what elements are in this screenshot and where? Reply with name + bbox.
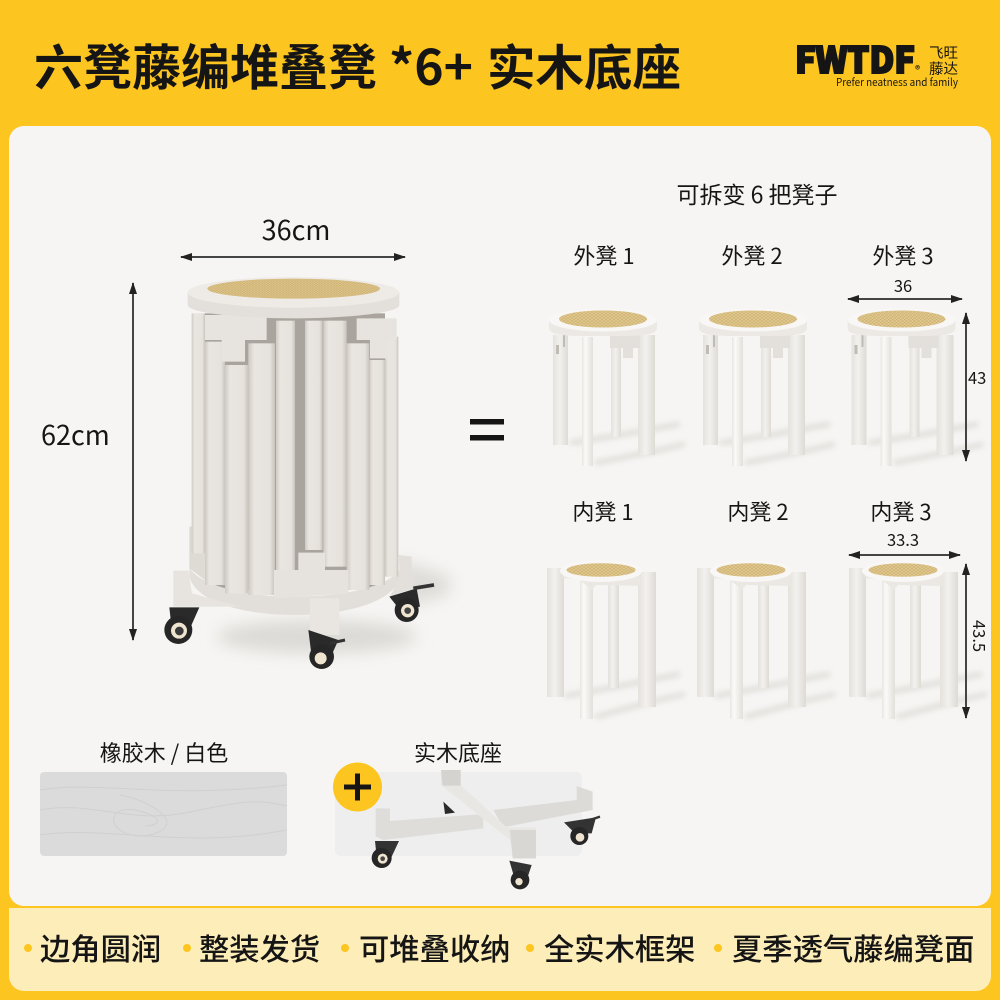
seat disc xyxy=(188,292,399,318)
bottom strip xyxy=(9,908,991,991)
inner stool 2 xyxy=(697,560,835,719)
logo xyxy=(795,32,958,90)
equals sign xyxy=(470,419,504,440)
left caster xyxy=(164,607,199,644)
inner stool 3 xyxy=(849,560,987,719)
plus badge xyxy=(333,762,382,812)
dimension: inner height 43.5: 43.5 xyxy=(968,620,992,652)
height dimension: 62cm: 62cm xyxy=(41,414,110,453)
title: *6+ xyxy=(389,29,473,100)
feature: stackable: 可堆叠收纳 xyxy=(359,925,510,969)
label: outer stool 3: 外凳 3 xyxy=(872,239,934,271)
outer stool 3 xyxy=(848,308,984,466)
logo: ® xyxy=(915,61,920,76)
folded stool legs xyxy=(192,313,398,595)
top brackets xyxy=(205,315,267,362)
bottom bracket xyxy=(274,553,348,598)
dimension: inner width 33.3: 33.3 xyxy=(887,527,919,551)
logo: 藤达 xyxy=(929,58,958,79)
label: outer stool 2: 外凳 2 xyxy=(721,239,783,271)
title: 六凳藤编堆叠凳 xyxy=(34,29,377,100)
left arm xyxy=(376,808,483,840)
inner stool 1 xyxy=(547,560,685,719)
dimension: outer height 43: 43 xyxy=(968,365,986,389)
label: outer stool 1: 外凳 1 xyxy=(573,239,635,271)
feature: shipped assembled: 整装发货 xyxy=(199,925,320,969)
right caster xyxy=(564,817,600,845)
label: solid wood base: 实木底座 xyxy=(414,736,502,768)
back-to-front beam xyxy=(441,770,536,858)
logo: 飞旺 xyxy=(929,42,958,63)
title: 实木底座 xyxy=(487,29,681,99)
base backdrop xyxy=(335,772,582,856)
stacked stool on caster base xyxy=(164,277,450,669)
dimension: outer width 36 xyxy=(848,273,962,299)
caster base arms xyxy=(173,571,240,607)
right caster xyxy=(389,585,434,622)
label: inner stool 3: 内凳 3 xyxy=(870,495,932,527)
dimension: outer width 36: 36 xyxy=(894,273,912,297)
rattan seat xyxy=(207,279,380,299)
left caster xyxy=(372,841,399,868)
outer stool 1 xyxy=(549,308,685,466)
logo: Prefer neatness and family xyxy=(836,75,958,90)
base disc xyxy=(189,568,401,615)
main panel xyxy=(9,126,991,906)
caster base xyxy=(372,770,600,889)
right arm xyxy=(493,786,593,827)
label: inner stool 2: 内凳 2 xyxy=(727,495,789,527)
wood swatch xyxy=(40,772,287,856)
logo: FWTDF xyxy=(795,32,915,84)
heading: converts to six stools: 可拆变 6 把凳子 xyxy=(676,176,838,210)
feature: rattan seat: 夏季透气藤编凳面 xyxy=(732,925,974,969)
feature: rounded edges: 边角圆润 xyxy=(40,925,161,969)
dimension: inner width 33.3 xyxy=(849,527,960,555)
title xyxy=(34,29,681,100)
width dimension: 36cm: 36cm xyxy=(262,209,330,248)
inner body shadow xyxy=(205,313,385,590)
back caster xyxy=(443,802,455,814)
label: material: 橡胶木 / 白色 xyxy=(100,736,228,768)
front caster xyxy=(308,630,345,669)
lower body corners xyxy=(189,527,205,580)
outer stool 2 xyxy=(699,308,835,466)
front caster xyxy=(509,861,532,889)
feature: solid wood frame: 全实木框架 xyxy=(544,925,695,969)
label: inner stool 1: 内凳 1 xyxy=(572,495,634,527)
